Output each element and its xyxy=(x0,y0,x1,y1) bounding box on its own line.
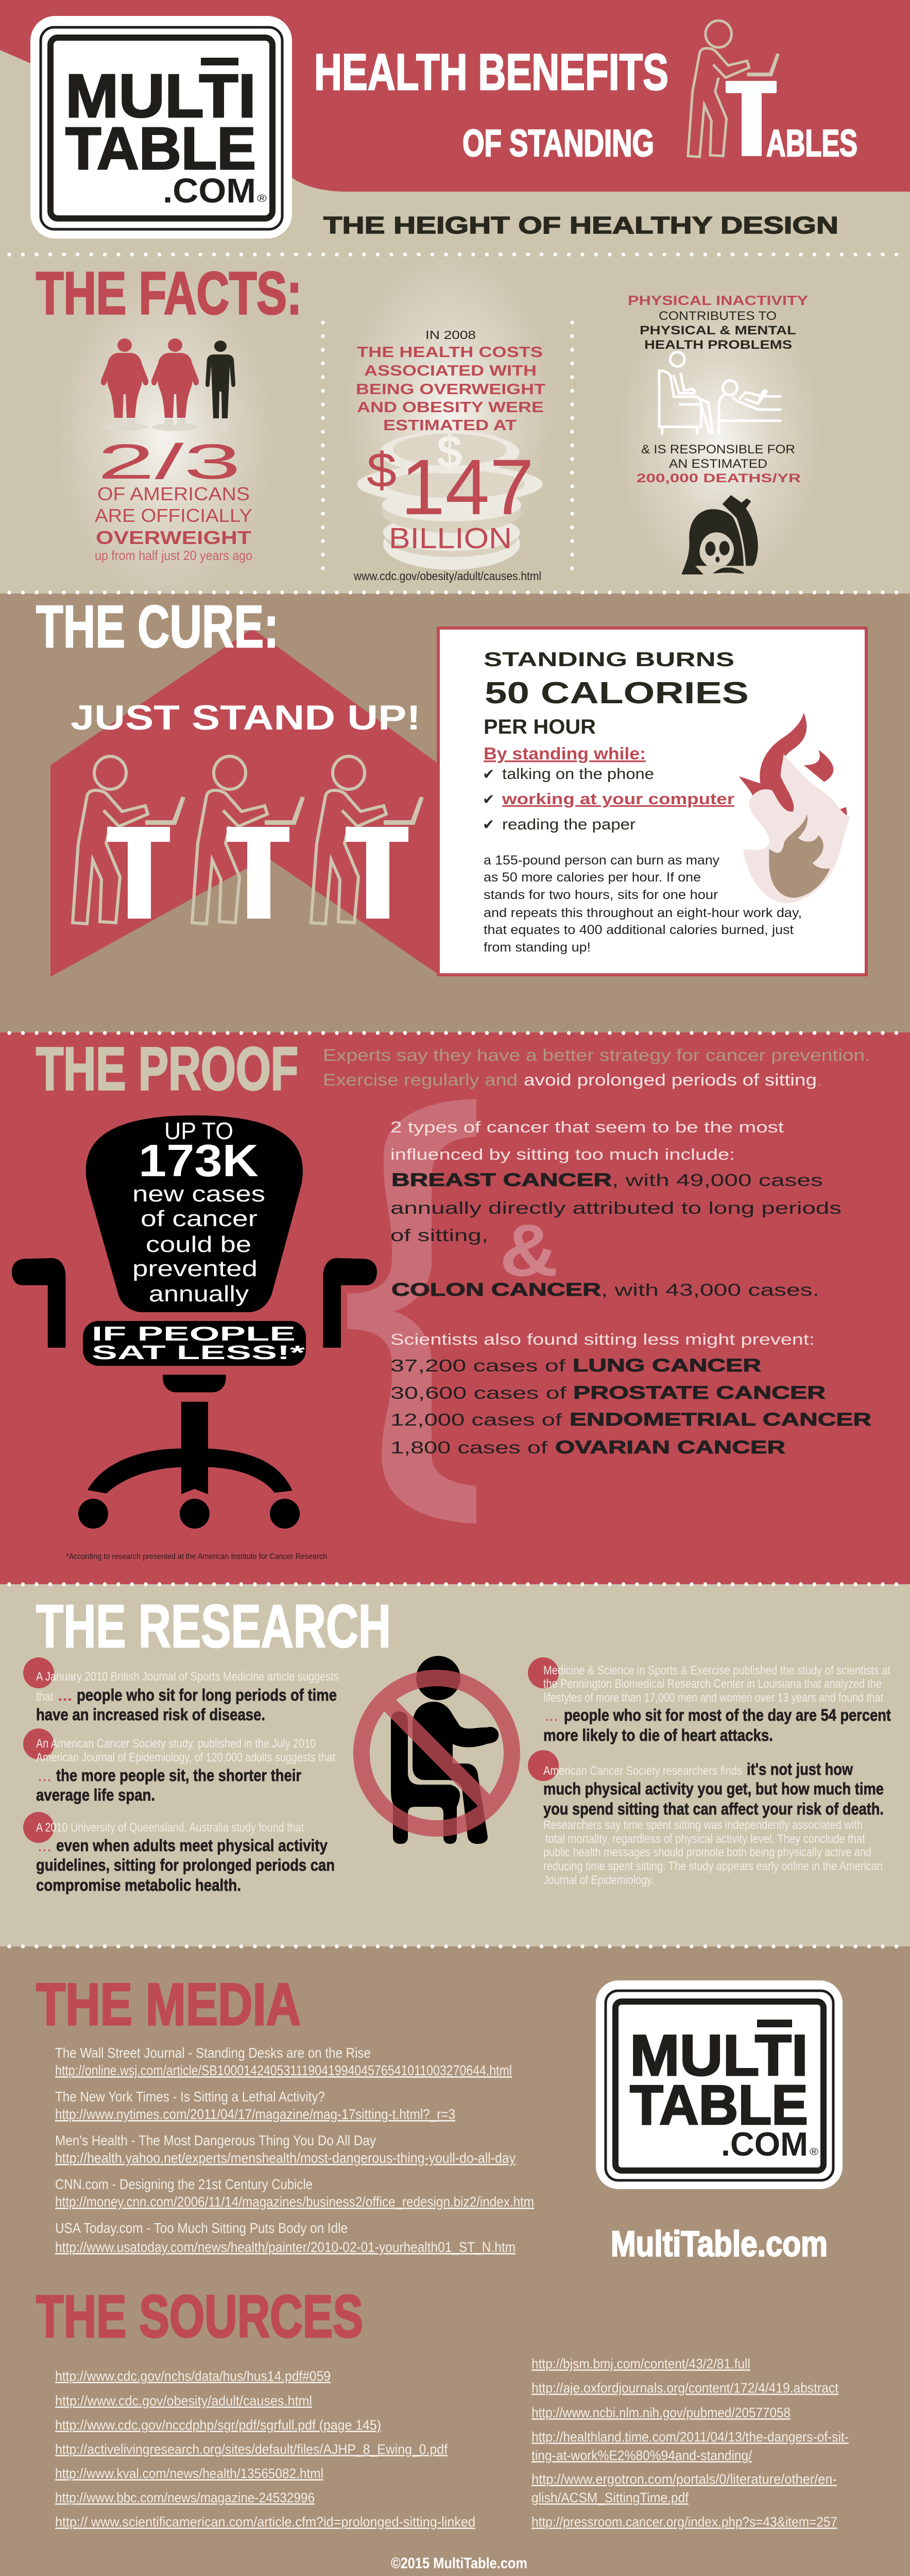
study: University of Queensland: even when adults meet physical activity xyxy=(56,1836,328,1855)
decorative brace xyxy=(347,1099,476,1523)
text: other cancers: Scientists also found sitting less might prevent: xyxy=(390,1330,815,1348)
study: British Journal of Sports Medicine: people who sit for long periods of time xyxy=(77,1686,337,1704)
stat: 173K: annually xyxy=(149,1281,249,1307)
icon: standing person at laptop xyxy=(688,21,780,157)
heading: THE RESEARCH xyxy=(36,1592,391,1660)
text: other cancers: LUNG CANCER xyxy=(573,1355,761,1376)
logo: MultiTable header: MULTI xyxy=(65,62,256,130)
icon: no sitting xyxy=(362,1656,512,1844)
study: University of Queensland: guidelines, sitting for prolonged periods can xyxy=(36,1856,335,1874)
list: sources right: http://www.ncbi.nlm.nih.gov/pubmed/20577058 xyxy=(531,2405,791,2420)
stat: two thirds: 2/3 xyxy=(97,434,241,489)
study: Medicine and Science in Sports: more likely to die of heart attacks. xyxy=(543,1726,773,1744)
chair base xyxy=(88,1375,293,1494)
list: by standing while: ✔ xyxy=(483,791,494,808)
title: ables: ABLES xyxy=(766,123,857,164)
panel: calories box xyxy=(438,628,866,975)
text: intro: avoid prolonged periods of sitting xyxy=(524,1071,817,1089)
callout: if people sat less xyxy=(92,1323,305,1364)
stat: two thirds: OF AMERICANS xyxy=(97,483,250,504)
stat: 173K: UP TO xyxy=(164,1117,233,1144)
study: British Journal of Sports Medicine: ... xyxy=(58,1687,72,1704)
stat: 173K: 173K xyxy=(139,1135,259,1186)
study: British Journal of Sports Medicine: that xyxy=(36,1690,53,1704)
title: table T: T xyxy=(726,57,777,179)
logo: MultiTable footer: ® xyxy=(810,2147,818,2158)
list: by standing while: talking on the phone xyxy=(502,766,654,783)
text: calorie explanation: a 155-pound person can burn as many xyxy=(484,853,720,868)
stat: physical inactivity: CONTRIBUTES TO xyxy=(659,309,777,323)
stat: health costs: BILLION xyxy=(389,522,512,555)
list: by standing while xyxy=(483,744,734,833)
text: calorie explanation: from standing up! xyxy=(484,940,591,955)
text: calorie explanation xyxy=(484,853,802,955)
list: sources left xyxy=(55,2368,475,2530)
text: other cancers: 37,200 cases of xyxy=(390,1356,566,1375)
footnote: *According to research presented at the American Institute for Cancer Research xyxy=(66,1552,327,1561)
text: other cancers xyxy=(390,1330,871,1458)
list: sources left: http:// www.scientificamerican.com/article.cfm?id=prolonged-sitting-linked xyxy=(55,2514,475,2530)
stat: health costs: BEING OVERWEIGHT xyxy=(356,381,545,398)
study: American Cancer Society: average life span. xyxy=(36,1786,155,1804)
list: sources left: http://www.cdc.gov/nchs/data/hus/hus14.pdf#059 xyxy=(55,2368,331,2384)
heading: the media: THE MEDIA xyxy=(36,1972,301,2038)
stat: health costs: $ xyxy=(367,443,397,498)
background: beige page xyxy=(0,0,910,594)
icon: flame xyxy=(739,713,850,903)
title: of standing: OF STANDING xyxy=(462,123,654,164)
text: two types of cancer: , with 43,000 cases. xyxy=(601,1280,819,1299)
study: Medicine and Science in Sports xyxy=(543,1664,891,1744)
red header shape xyxy=(0,0,910,192)
study: American Cancer Society: American Journal of Epidemiology, of 120,000 adults suggests that xyxy=(36,1751,335,1765)
text: two types of cancer: 2 types of cancer that seem to be the most xyxy=(390,1118,784,1136)
stat: physical inactivity: PHYSICAL & MENTAL xyxy=(640,324,796,337)
study: American Cancer Society researchers xyxy=(543,1760,884,1887)
panel: the cure xyxy=(0,592,910,1032)
list: media links xyxy=(55,2045,534,2255)
text: two types of cancer: influenced by sitting too much include: xyxy=(390,1145,735,1163)
callout: just stand up: JUST STAND UP! xyxy=(71,698,421,737)
list: sources right: glish/ACSM_SittingTime.pdf xyxy=(531,2490,689,2505)
study: University of Queensland: compromise metabolic health. xyxy=(36,1876,241,1894)
stat: two thirds xyxy=(95,434,252,563)
list: sources left: http://www.cdc.gov/obesity/adult/causes.html xyxy=(55,2393,312,2409)
list: by standing while: ✔ xyxy=(483,816,494,833)
list: media links: CNN.com - Designing the 21st Century Cubicle xyxy=(55,2176,313,2192)
text: two types of cancer: COLON CANCER xyxy=(391,1280,601,1300)
stat: two thirds: OVERWEIGHT xyxy=(96,527,251,548)
list: media links: The New York Times - Is Sitting a Lethal Activity? xyxy=(55,2089,325,2105)
icon: grim reaper xyxy=(681,495,758,574)
panel: the research xyxy=(0,1584,910,1946)
text: other cancers: 30,600 cases of xyxy=(390,1383,567,1402)
list: by standing while: working at your computer xyxy=(502,790,734,808)
study: American Cancer Society researchers: it's not just how xyxy=(747,1760,853,1778)
logo: MultiTable footer: MULTI xyxy=(630,2023,808,2088)
callout: if people sat less: IF PEOPLE xyxy=(92,1323,296,1345)
stat: 173K: prevented xyxy=(132,1256,257,1281)
list: media links: USA Today.com - Too Much Sitting Puts Body on Idle xyxy=(55,2220,348,2236)
study: British Journal of Sports Medicine: have an increased risk of disease. xyxy=(36,1705,265,1724)
study: British Journal of Sports Medicine: A January 2010 British Journal of Sports Medicine article suggests xyxy=(36,1670,339,1684)
text: website: MultiTable.com xyxy=(611,2224,828,2264)
list: sources right: http://pressroom.cancer.org/index.php?s=43&item=257 xyxy=(531,2514,837,2530)
text: calorie explanation: that equates to 400 additional calories burned, just xyxy=(484,923,794,937)
icon: office chair xyxy=(12,1115,377,1529)
title: health benefits: HEALTH BENEFITS xyxy=(314,43,668,100)
study: University of Queensland xyxy=(36,1821,335,1894)
text: ampersand: & xyxy=(500,1210,558,1292)
stat: health costs: ASSOCIATED WITH xyxy=(364,363,537,379)
study: Medicine and Science in Sports: ... xyxy=(545,1707,558,1724)
logo: MultiTable footer: TABLE xyxy=(630,2074,808,2137)
study: University of Queensland: ... xyxy=(38,1838,51,1855)
logo: MultiTable header: TABLE xyxy=(65,115,256,182)
panel: the proof xyxy=(0,1032,910,1584)
list: sources right: ting-at-work%E2%80%94and-standing/ xyxy=(531,2448,752,2463)
heading: THE CURE: xyxy=(36,593,279,660)
logo: MultiTable header xyxy=(30,16,292,239)
stat: 173K: new cases xyxy=(132,1181,265,1207)
text: intro: Experts say they have a better strategy for cancer prevention. xyxy=(323,1046,870,1064)
heading: THE FACTS: xyxy=(36,260,302,327)
panel: media and sources xyxy=(0,1946,910,2576)
copyright: ©2015 MultiTable.com xyxy=(391,2555,527,2572)
list: by standing while: By standing while: xyxy=(484,744,646,763)
list: media links: http://www.nytimes.com/2011/04/17/magazine/mag-17sitting-t.html?_r=3 xyxy=(55,2106,455,2122)
study: American Cancer Society researchers: American Cancer Society researchers finds xyxy=(543,1764,742,1778)
panel: header xyxy=(0,0,910,239)
text: two types of cancer: annually directly attributed to long periods xyxy=(390,1198,842,1217)
text: intro: . xyxy=(817,1071,822,1089)
icon: three standing figures at tables xyxy=(73,756,424,924)
heading: 50 calories: 50 CALORIES xyxy=(485,676,749,710)
list: by standing while: ✔ xyxy=(483,766,494,783)
list: sources left: http://www.bbc.com/news/magazine-24532996 xyxy=(55,2490,315,2505)
text: calorie explanation: stands for two hours, sits for one hour xyxy=(484,888,718,902)
stat: two thirds: up from half just 20 years ago xyxy=(95,548,252,563)
text: other cancers: ENDOMETRIAL CANCER xyxy=(570,1410,871,1430)
stat: deaths per year: & IS RESPONSIBLE FOR xyxy=(641,443,795,456)
study: American Cancer Society: ... xyxy=(38,1768,51,1785)
stat: 173K: could be xyxy=(146,1232,251,1257)
text: other cancers: 12,000 cases of xyxy=(390,1410,562,1429)
stat: health costs: AND OBESITY WERE xyxy=(357,399,544,416)
stat: health costs: IN 2008 xyxy=(425,328,476,342)
text: other cancers: OVARIAN CANCER xyxy=(555,1437,785,1458)
study: University of Queensland: A 2010 University of Queensland, Australia study found that xyxy=(36,1821,304,1835)
logo: MultiTable header: .COM xyxy=(163,172,256,210)
stat: deaths per year xyxy=(637,443,801,485)
stat: two thirds: ARE OFFICIALLY xyxy=(95,505,252,526)
list: sources left: http://activelivingresearch.org/sites/default/files/AJHP_8_Ewing_0.pdf xyxy=(55,2442,448,2457)
stat: 173K xyxy=(132,1117,265,1307)
stat: physical inactivity: HEALTH PROBLEMS xyxy=(644,338,792,352)
text: two types of cancer: BREAST CANCER xyxy=(391,1170,612,1190)
bullets: red circles xyxy=(23,1657,559,1843)
stat: deaths per year: AN ESTIMATED xyxy=(669,457,767,471)
stat: physical inactivity: PHYSICAL INACTIVITY xyxy=(628,293,808,308)
list: media links: The Wall Street Journal - Standing Desks are on the Rise xyxy=(55,2045,371,2061)
heading: THE PROOF xyxy=(36,1035,298,1103)
arrow: red chevron xyxy=(50,629,437,977)
study: American Cancer Society: the more people sit, the shorter their xyxy=(56,1766,301,1785)
tagline: THE HEIGHT OF HEALTHY DESIGN xyxy=(323,212,838,239)
stat: 173K: of cancer xyxy=(141,1206,257,1231)
list: sources right: http://healthland.time.com/2011/04/13/the-dangers-of-sit- xyxy=(531,2429,849,2445)
text: calorie explanation: and repeats this throughout an eight-hour work day, xyxy=(484,906,802,920)
chair seat xyxy=(83,1321,306,1366)
list: sources right: http://aje.oxfordjournals.org/content/172/4/419.abstract xyxy=(531,2380,838,2396)
stat: physical inactivity xyxy=(628,293,808,352)
callout: if people sat less: SAT LESS!* xyxy=(92,1342,305,1364)
study: British Journal of Sports Medicine xyxy=(36,1670,339,1724)
list: media links: http://health.yahoo.net/experts/menshealth/most-dangerous-thing-youll-do-all-day xyxy=(55,2150,516,2166)
text: intro: Exercise regularly and xyxy=(323,1071,518,1089)
stat: deaths per year: 200,000 DEATHS/YR xyxy=(637,471,801,485)
list: media links: http://www.usatoday.com/news/health/painter/2010-02-01-yourhealth01_ST_N.htm xyxy=(55,2239,516,2255)
list: media links: http://money.cnn.com/2006/11/14/magazines/business2/office_redesign.biz2/index.htm xyxy=(55,2194,534,2210)
list: media links: Men's Health - The Most Dangerous Thing You Do All Day xyxy=(55,2132,376,2148)
study: American Cancer Society xyxy=(36,1737,335,1804)
chair back xyxy=(86,1115,303,1312)
text: two types of cancer: of sitting, xyxy=(390,1226,488,1245)
text: calorie explanation: as 50 more calories per hour. If one xyxy=(484,870,701,885)
text: two types of cancer: , with 49,000 cases xyxy=(612,1171,823,1190)
stat: health costs: ESTIMATED AT xyxy=(383,417,517,434)
text: other cancers: PROSTATE CANCER xyxy=(573,1383,826,1403)
heading: per hour: PER HOUR xyxy=(484,716,596,738)
stat: health costs xyxy=(353,328,545,583)
panel: the facts xyxy=(36,247,822,603)
icon: sitting and lying figures xyxy=(659,352,780,434)
text: other cancers: 1,800 cases of xyxy=(390,1438,548,1457)
list: media links: http://online.wsj.com/article/SB10001424053111904199404576541011003270644.html xyxy=(55,2062,512,2078)
stat: health costs: www.cdc.gov/obesity/adult/causes.html xyxy=(353,569,541,583)
list: sources right: http://bjsm.bmj.com/content/43/2/81.full xyxy=(531,2356,750,2371)
stat: health costs: THE HEALTH COSTS xyxy=(357,344,543,361)
text: white dollar on coin: $ xyxy=(437,427,462,478)
logo: MultiTable footer xyxy=(596,1980,843,2189)
heading: standing burns: STANDING BURNS xyxy=(484,649,734,671)
list: sources right xyxy=(531,2356,849,2530)
heading: the sources: THE SOURCES xyxy=(36,2283,363,2350)
text: intro xyxy=(323,1046,870,1089)
icon: three figures xyxy=(101,338,235,432)
logo: MultiTable footer: .COM xyxy=(721,2125,808,2163)
text: two types of cancer xyxy=(390,1118,842,1300)
list: sources left: http://www.kval.com/news/health/13565082.html xyxy=(55,2466,323,2481)
list: sources right: http://www.ergotron.com/portals/0/literature/other/en- xyxy=(531,2471,837,2487)
icon: coin stack xyxy=(357,431,543,570)
list: by standing while: reading the paper xyxy=(502,816,636,833)
logo: MultiTable header: ® xyxy=(257,193,267,205)
stat: health costs: 147 xyxy=(401,443,534,531)
study: American Cancer Society: An American Cancer Society study, published in the July 2010 xyxy=(36,1737,316,1751)
list: sources left: http://www.cdc.gov/nccdphp/sgr/pdf/sgrfull.pdf (page 145) xyxy=(55,2417,381,2433)
chair arms xyxy=(12,1258,377,1348)
chair wheels xyxy=(78,1499,300,1529)
study: American Cancer Society researchers: Journal of Epidemiology. xyxy=(543,1873,654,1887)
